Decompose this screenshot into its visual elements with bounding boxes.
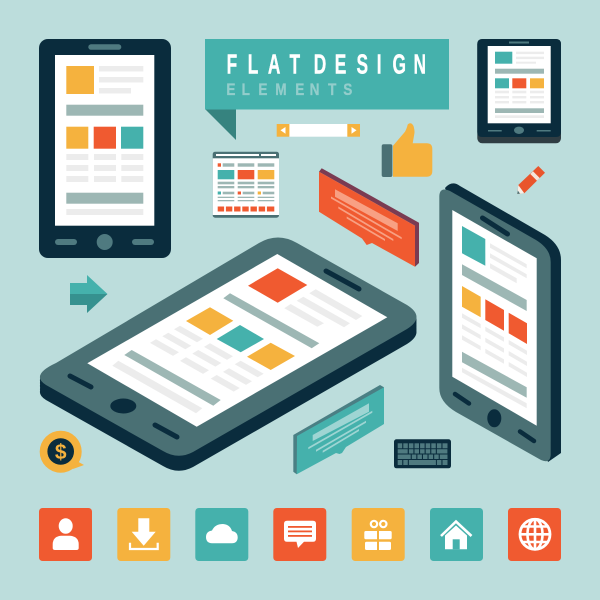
panel: isometric portrait phone — [439, 183, 561, 462]
icon: globe tile — [508, 508, 561, 561]
arrow: teal right arrow — [70, 275, 108, 313]
phone face — [40, 238, 417, 456]
panel: upright phone — [39, 39, 171, 258]
icon: download tile — [117, 508, 170, 561]
icon: pencil — [517, 166, 545, 194]
icon: keyboard — [394, 439, 451, 468]
slider control — [277, 124, 360, 137]
banner: title ribbon — [205, 39, 449, 140]
icon: message tile — [273, 508, 326, 561]
portrait phone content — [462, 226, 527, 408]
callout: teal isometric speech bubble — [293, 385, 384, 474]
phone screen — [87, 254, 387, 427]
phone content — [66, 66, 143, 215]
icon: dollar coin bubble — [40, 431, 84, 473]
callout: orange isometric speech bubble — [319, 168, 419, 267]
panel: browser window — [213, 152, 279, 218]
panel: tablet — [477, 39, 561, 143]
subtitle: elements: ELEMENTS — [226, 81, 352, 99]
screen content — [112, 268, 362, 413]
icon: dollar coin bubble: $ — [55, 441, 67, 464]
title: flat design: FLATDESIGN — [227, 48, 426, 80]
phone side — [40, 240, 417, 471]
tablet content — [495, 52, 544, 118]
icon: cloud tile — [195, 508, 248, 561]
icon: house tile — [430, 508, 483, 561]
panel: isometric landscape phone — [40, 238, 417, 471]
icon: user tile — [39, 508, 92, 561]
icon: thumbs up — [382, 123, 432, 177]
icon: gift tile — [352, 508, 405, 561]
